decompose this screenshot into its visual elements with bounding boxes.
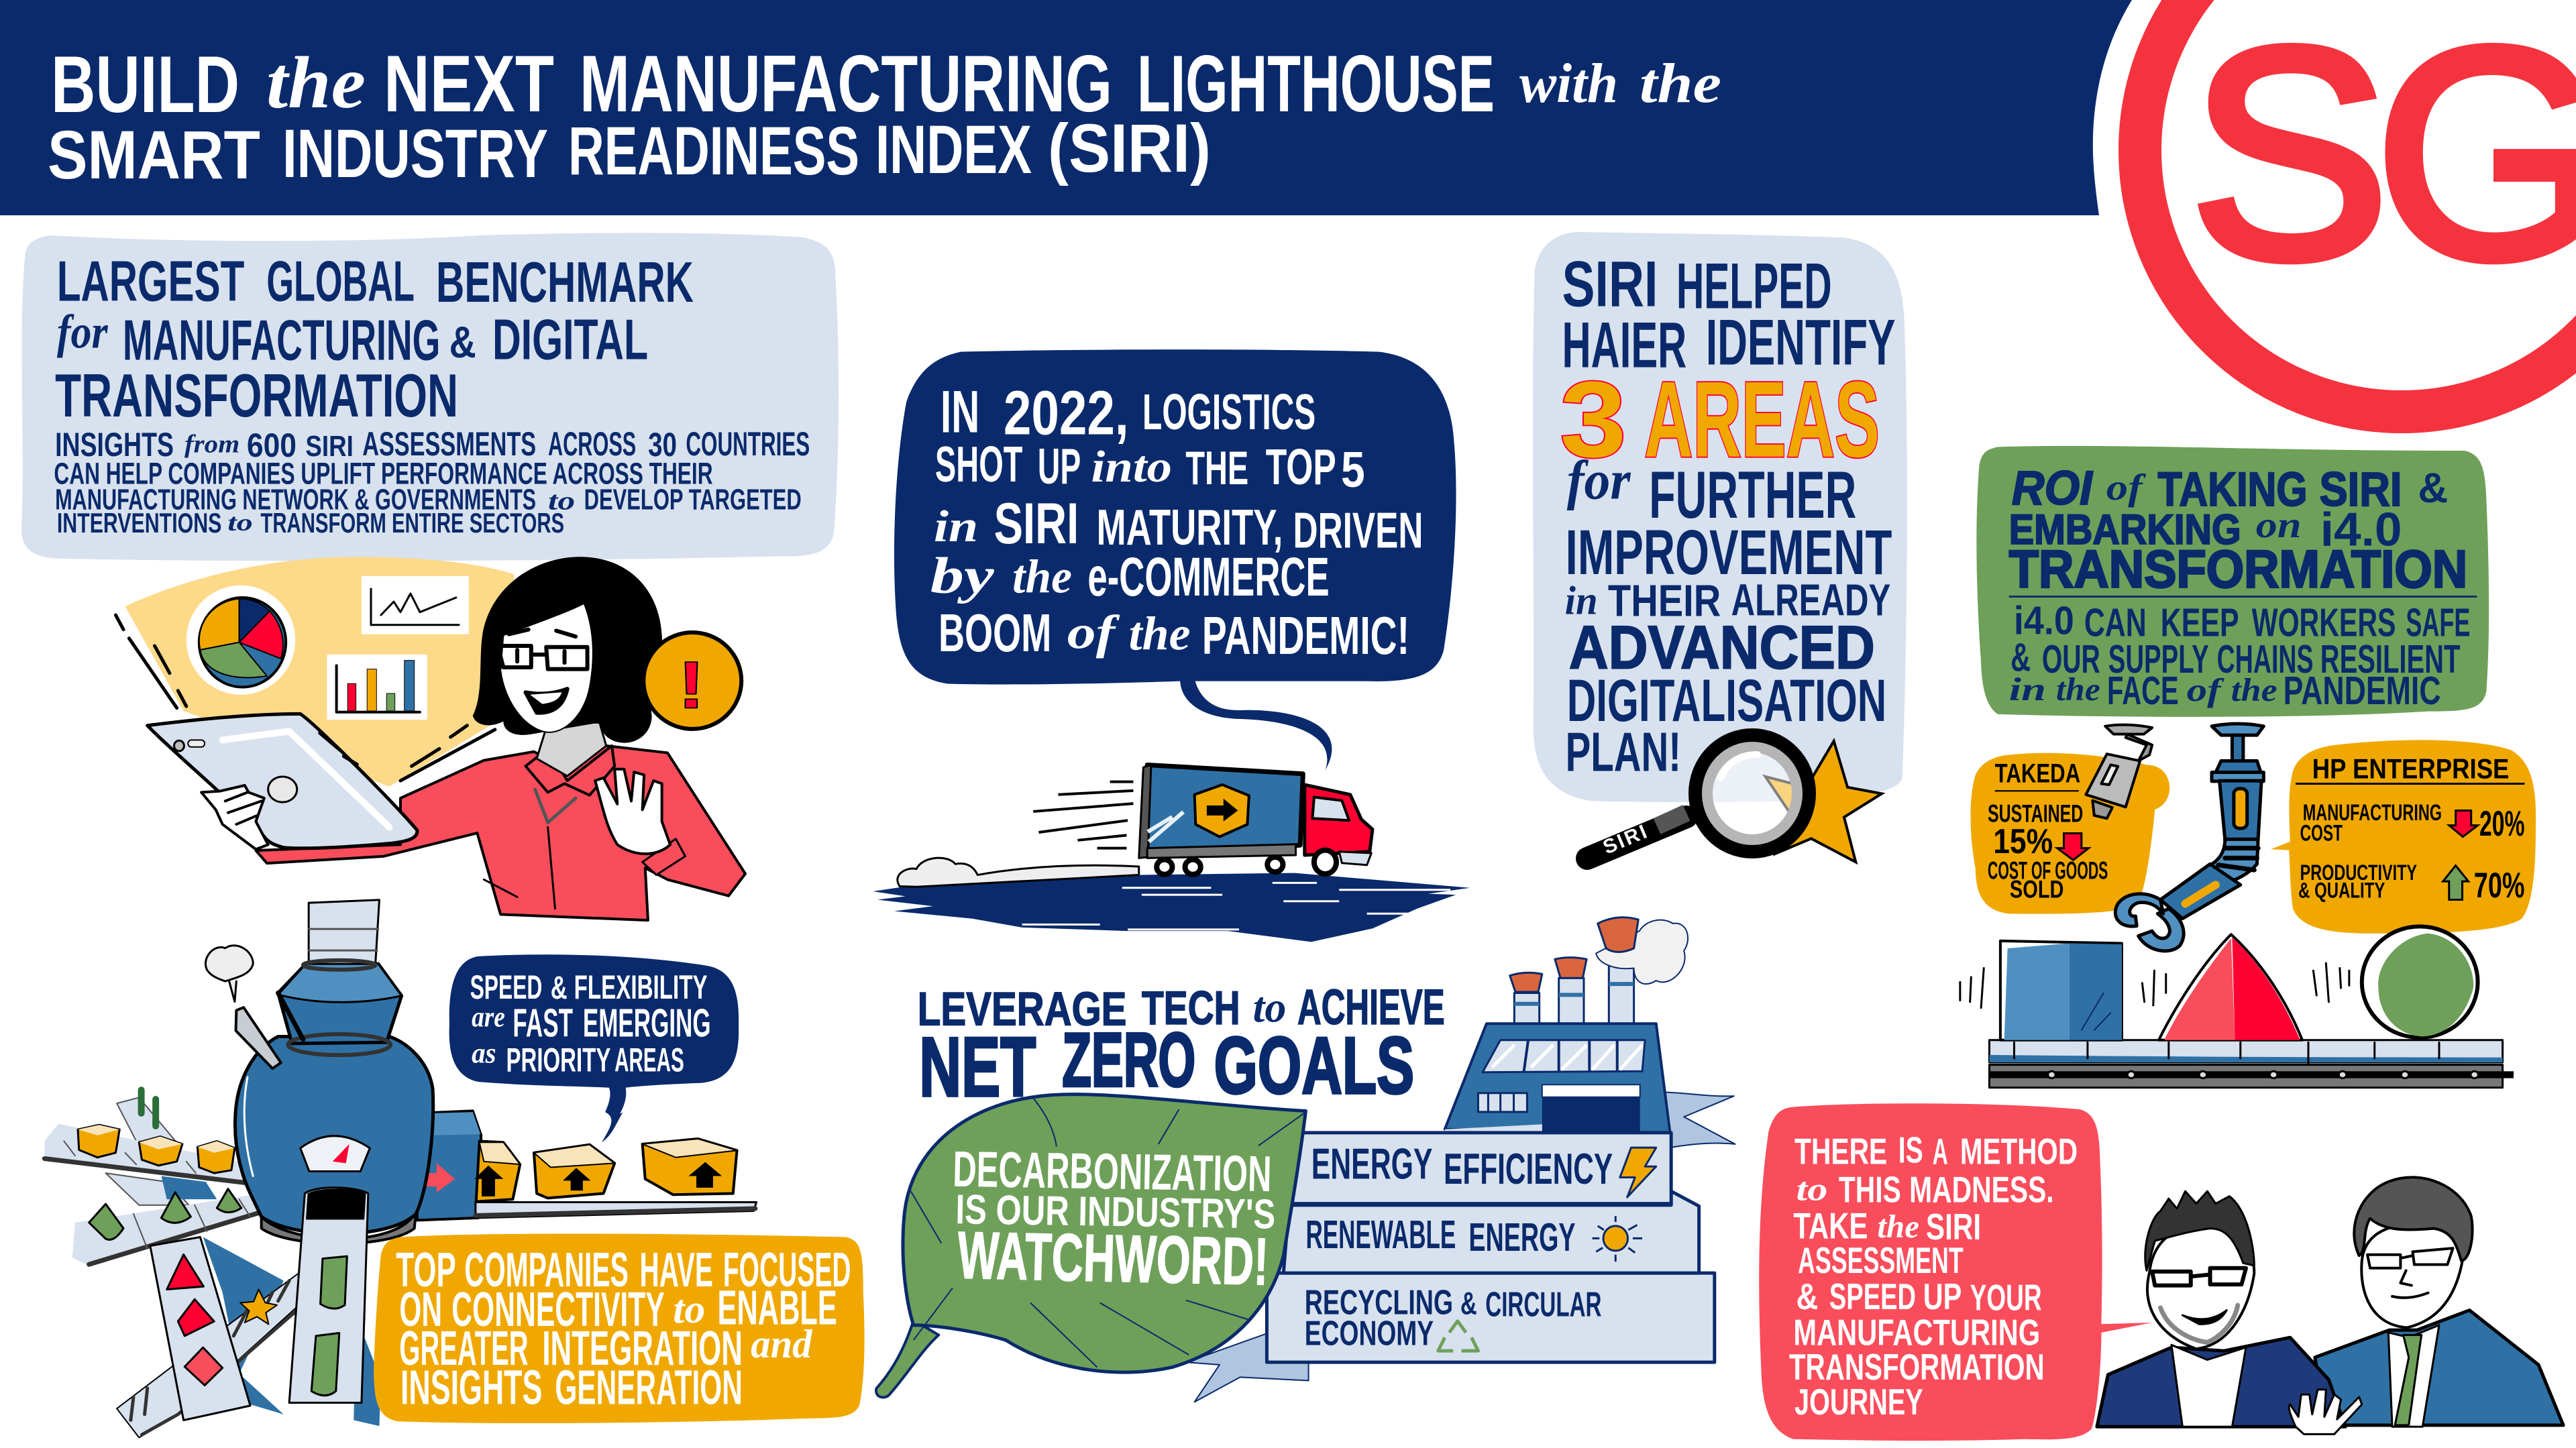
glasses xyxy=(498,646,588,669)
arrow: down red xyxy=(2449,810,2478,837)
text: AREAS xyxy=(1644,359,1880,480)
shirt and arm xyxy=(256,746,745,920)
panel: SIRI helped Haier: for xyxy=(1567,449,1631,510)
projection beam xyxy=(125,557,515,787)
leaf: WATCHWORD! xyxy=(957,1218,1269,1299)
panel: ROI of taking SIRI: TRANSFORMATION xyxy=(2009,541,2467,599)
icon: star xyxy=(1766,741,1882,862)
callout: top companies: COMPANIES xyxy=(464,1243,629,1298)
speech bubble: logistics: PANDEMIC! xyxy=(1202,606,1409,665)
leaf: DECARBONIZATION xyxy=(953,1140,1272,1202)
panel: ROI of taking SIRI: CAN xyxy=(2084,600,2147,645)
callout: Takeda: TAKEDA xyxy=(1995,758,2080,788)
step: recycling: & xyxy=(1460,1286,1477,1321)
callout: Takeda: SUSTAINED xyxy=(1988,800,2083,828)
callout: there is a method: SPEED xyxy=(1829,1277,1916,1317)
speech bubble: logistics: BOOM xyxy=(938,603,1051,663)
speech bubble: logistics: into xyxy=(1091,442,1172,492)
speech bubble: speed and flexibility: are xyxy=(472,1001,505,1034)
machine: pipe xyxy=(236,1007,281,1068)
callout: HP Enterprise: COST xyxy=(2300,820,2343,846)
callout: there is a method: & xyxy=(1796,1277,1818,1317)
panel: ROI of taking SIRI: PANDEMIC xyxy=(2284,668,2441,713)
callout: there is a method: JOURNEY xyxy=(1794,1382,1923,1423)
panel: SIRI helped Haier xyxy=(1533,232,1907,862)
panel: ROI of taking SIRI: OUR xyxy=(2042,636,2100,681)
heading: net zero goals xyxy=(918,979,1445,1115)
chute with cylinders xyxy=(289,1188,368,1403)
callout: there is a method: IS xyxy=(1898,1130,1923,1171)
body text: insights: 600 xyxy=(247,427,297,464)
icon: lightning bolt xyxy=(1620,1148,1656,1197)
title banner: INDUSTRY xyxy=(282,115,548,192)
truck box xyxy=(1147,765,1303,855)
step: recycling xyxy=(1267,1273,1715,1362)
panel: ROI of taking SIRI: in xyxy=(2009,671,2046,708)
panel: ROI of taking SIRI: WORKERS xyxy=(2252,600,2396,645)
callout: top companies: CONNECTIVITY xyxy=(451,1283,665,1337)
speech bubble: speed and flexibility xyxy=(449,954,739,1142)
heading: net zero goals: TECH xyxy=(1142,981,1240,1034)
callout: there is a method: TAKE xyxy=(1793,1206,1868,1247)
star xyxy=(240,1290,277,1325)
text: COUNTRIES xyxy=(686,425,810,463)
left man xyxy=(2097,1191,2345,1427)
pie chart xyxy=(186,586,295,695)
callout: HP Enterprise: MANUFACTURING xyxy=(2303,799,2442,826)
callout: top companies: ON xyxy=(399,1283,442,1337)
arrow: down red xyxy=(2057,833,2089,860)
heading: largest global benchmark: MANUFACTURING xyxy=(123,309,440,372)
panel: ROI of taking SIRI: ROI xyxy=(2012,462,2093,515)
heading: net zero goals: ACHIEVE xyxy=(1297,979,1445,1035)
road xyxy=(873,873,1470,942)
leaf: IS OUR INDUSTRY'S xyxy=(955,1186,1276,1237)
heading: net zero goals: to xyxy=(1253,983,1286,1031)
title banner: READINESS xyxy=(568,113,859,189)
text: IDENTIFY xyxy=(1706,307,1895,379)
panel: ROI of taking SIRI: EMBARKING xyxy=(2009,506,2241,553)
callout: there is a method: to xyxy=(1796,1172,1827,1208)
blue cube xyxy=(2000,941,2122,1040)
speech bubble: logistics: e-COMMERCE xyxy=(1087,547,1330,608)
right man xyxy=(2315,1177,2563,1427)
raised hand xyxy=(595,769,670,854)
raised hand xyxy=(2289,1390,2362,1434)
ribbon left xyxy=(1186,1333,1309,1402)
panel: SIRI helped Haier: PLAN! xyxy=(1566,721,1681,783)
machine: duct with arrow xyxy=(417,1111,481,1220)
step: renewable: ENERGY xyxy=(1468,1215,1576,1260)
body text: insights: MANUFACTURING NETWORK & GOVERNMENTS xyxy=(55,483,536,516)
panel: SIRI helped Haier: in xyxy=(1565,578,1598,623)
speech bubble: logistics: in xyxy=(934,502,978,551)
panel: SIRI helped Haier: FURTHER xyxy=(1649,458,1856,532)
step: recycling: CIRCULAR xyxy=(1485,1284,1602,1324)
body text: insights: INTERVENTIONS xyxy=(57,507,221,539)
ribbon right xyxy=(1659,1092,1735,1148)
speech bubble: speed and flexibility: FLEXIBILITY xyxy=(574,968,708,1006)
text: IMPROVEMENT xyxy=(1566,517,1892,588)
speech bubble: logistics: MATURITY, xyxy=(1097,500,1283,556)
panel: ROI of taking SIRI: SIRI xyxy=(2320,463,2402,516)
camera xyxy=(2086,725,2152,818)
red pyramid xyxy=(2159,934,2302,1040)
callout: there is a method: YOUR xyxy=(1970,1278,2042,1319)
speech bubble: logistics: IN xyxy=(941,378,979,445)
heading: net zero goals: ZERO xyxy=(1062,1017,1195,1103)
factory xyxy=(1445,917,1688,1133)
bar chart card xyxy=(327,655,427,720)
panel: SIRI helped Haier: ALREADY xyxy=(1731,575,1890,625)
panel: ROI of taking SIRI: SAFE xyxy=(2406,600,2470,645)
speech bubble: logistics: the xyxy=(1012,550,1072,603)
icon: magnifying glass xyxy=(1587,735,1809,858)
heading: largest global benchmark: LARGEST xyxy=(57,249,244,313)
panel: ROI of taking SIRI: FACE xyxy=(2107,668,2179,713)
callout: top companies: ENABLE xyxy=(718,1281,837,1335)
panel: ROI of taking SIRI: of xyxy=(2106,468,2147,508)
illustration: smart factory machine and conveyors xyxy=(44,900,757,1438)
face xyxy=(500,604,593,732)
step: energy efficiency: EFFICIENCY xyxy=(1444,1144,1613,1193)
speed lines xyxy=(1033,782,1133,848)
conveyor: cones xyxy=(72,1189,262,1266)
body text: insights: ACROSS xyxy=(548,425,636,463)
speech bubble: logistics: the xyxy=(1129,607,1190,660)
title banner xyxy=(0,0,2132,215)
callout: there is a method: METHOD xyxy=(1960,1131,2078,1172)
arrow: up green xyxy=(2443,866,2469,900)
line chart card xyxy=(362,576,469,634)
speech bubble: logistics: SHOT xyxy=(935,436,1022,492)
vibration lines xyxy=(1960,963,2349,1008)
speech bubble: logistics: SIRI xyxy=(994,492,1079,556)
title banner: the xyxy=(266,42,366,123)
speech bubble: speed and flexibility: AREAS xyxy=(614,1041,684,1079)
callout: HP Enterprise: & QUALITY xyxy=(2298,879,2385,903)
panel: SIRI helped Haier: ADVANCED xyxy=(1569,614,1875,681)
panel: ROI of taking SIRI: i4.0 xyxy=(2014,598,2074,643)
panel: ROI of taking SIRI: & xyxy=(2010,635,2031,679)
title banner: with xyxy=(1519,52,1618,115)
text: DIGITALISATION xyxy=(1567,667,1886,734)
callout: there is a method: THERE xyxy=(1794,1131,1887,1172)
panel: ROI of taking SIRI: TAKING xyxy=(2158,463,2308,516)
callout: Takeda: 15% xyxy=(1993,822,2053,860)
collar and necklace xyxy=(525,746,614,795)
exclamation bubble: ! xyxy=(678,648,705,722)
wheels xyxy=(1157,850,1336,875)
heading: largest global benchmark: & xyxy=(449,318,476,367)
panel: ROI of taking SIRI: RESILIENT xyxy=(2320,636,2460,681)
panel: SIRI helped Haier: SIRI xyxy=(1562,247,1658,320)
heading: largest global benchmark xyxy=(55,249,694,429)
conveyor: bottom left xyxy=(117,1272,301,1438)
truck cab xyxy=(1305,785,1373,865)
illustration: robot arm, camera and production line xyxy=(1960,724,2514,1088)
panel: ROI of taking SIRI: of xyxy=(2187,671,2224,708)
title banner: LIGHTHOUSE xyxy=(1137,39,1495,129)
body text: insights: TRANSFORM ENTIRE SECTORS xyxy=(260,507,564,539)
speech bubble: logistics: UP xyxy=(1038,438,1081,494)
heading: largest global benchmark: GLOBAL xyxy=(266,249,415,313)
callout: Takeda: SOLD xyxy=(2010,876,2064,903)
body text: insights xyxy=(54,425,810,539)
callout: there is a method: THIS xyxy=(1839,1170,1901,1211)
cuff xyxy=(643,839,685,875)
speech bubble: speed and flexibility: & xyxy=(551,970,568,1006)
step: recycling: RECYCLING xyxy=(1305,1282,1453,1322)
panel: ROI of taking SIRI: KEEP xyxy=(2161,600,2239,645)
step: energy efficiency xyxy=(1292,1133,1671,1204)
panel: ROI of taking SIRI: the xyxy=(2231,671,2277,708)
panel: SIRI helped Haier: HAIER xyxy=(1562,309,1686,381)
panel: ROI of taking SIRI: on xyxy=(2256,506,2302,546)
callout: top companies xyxy=(374,1233,865,1423)
speech bubble: logistics: 5 xyxy=(1341,442,1365,498)
title banner: NEXT xyxy=(384,39,554,129)
body text: insights: SIRI xyxy=(305,429,354,463)
speech bubble: logistics xyxy=(894,349,1456,770)
callout: HP Enterprise: 20% xyxy=(2479,803,2524,843)
heading: net zero goals: NET xyxy=(919,1020,1036,1115)
speech bubble: logistics: DRIVEN xyxy=(1293,502,1423,559)
step: renewable: RENEWABLE xyxy=(1305,1213,1456,1257)
body text: insights: INSIGHTS xyxy=(55,426,174,463)
callout: there is a method: A xyxy=(1933,1131,1948,1172)
speech bubble: logistics: by xyxy=(930,547,994,604)
callout: there is a method: the xyxy=(1877,1209,1919,1245)
callout: Takeda xyxy=(1970,753,2169,914)
callout: top companies: HAVE xyxy=(639,1243,713,1298)
blue lower structure xyxy=(161,1176,381,1426)
conveyor: output boxes xyxy=(474,1139,757,1218)
body text: insights: to xyxy=(548,486,575,516)
title banner: (SIRI) xyxy=(1048,110,1211,186)
callout: there is a method xyxy=(1759,1103,2152,1441)
conveyor: boxes input xyxy=(44,1123,250,1183)
illustration: two men in suits xyxy=(2097,1177,2563,1434)
tablet xyxy=(148,714,417,848)
callout: HP Enterprise: PRODUCTIVITY xyxy=(2300,861,2417,885)
icon: recycling triangle xyxy=(1438,1321,1478,1351)
speech bubble: logistics: THE xyxy=(1185,442,1248,494)
panel: SIRI helped Haier: HELPED xyxy=(1676,249,1832,322)
callout: top companies: TOP xyxy=(396,1243,456,1298)
title banner: INDEX xyxy=(875,111,1032,188)
title banner: SMART xyxy=(48,117,260,193)
body text: insights: 30 xyxy=(648,426,677,463)
callout: there is a method: ASSESSMENT xyxy=(1798,1241,1964,1281)
callout: HP Enterprise: HP ENTERPRISE xyxy=(2312,754,2509,785)
panel: ROI of taking SIRI: CHAINS xyxy=(2217,636,2314,681)
callout: there is a method: SIRI xyxy=(1926,1207,1981,1247)
panel: ROI of taking SIRI xyxy=(1976,446,2489,717)
robot arm xyxy=(2115,724,2263,951)
panel: largest global benchmark: BENCHMARK xyxy=(436,251,694,314)
speech bubble: speed and flexibility: SPEED xyxy=(470,968,542,1006)
motion lines xyxy=(115,615,495,781)
machine: tank xyxy=(235,900,433,1243)
callout: Takeda: COST OF GOODS xyxy=(1988,857,2108,885)
heading: net zero goals: GOALS xyxy=(1214,1021,1414,1110)
panel: largest global benchmark: DEVELOP TARGETED xyxy=(584,483,802,516)
steam cloud xyxy=(205,946,253,1001)
callout: top companies: to xyxy=(673,1286,705,1331)
body text: insights: to xyxy=(227,508,253,536)
exclamation bubble xyxy=(626,632,741,729)
callout: there is a method: TRANSFORMATION xyxy=(1789,1347,2045,1388)
step: renewable xyxy=(1283,1191,1699,1273)
title banner: MANUFACTURING xyxy=(580,39,1112,129)
callout: top companies: GENERATION xyxy=(555,1361,743,1415)
speech bubble: speed and flexibility: PRIORITY xyxy=(506,1041,610,1079)
callout: top companies: FOCUSED xyxy=(723,1243,851,1298)
heading: largest global benchmark: TRANSFORMATION xyxy=(55,361,458,429)
speech bubble: speed and flexibility: FAST xyxy=(513,1001,573,1046)
hair xyxy=(473,557,662,743)
highlight: 3 areas: 3 xyxy=(1560,359,1626,480)
callout: there is a method: UP xyxy=(1923,1277,1962,1317)
callout: top companies: INSIGHTS xyxy=(400,1361,542,1415)
title banner: the xyxy=(1640,52,1721,115)
speech bubble: logistics: 2022, xyxy=(1004,378,1129,448)
neck xyxy=(537,722,606,776)
heading: largest global benchmark: DIGITAL xyxy=(492,308,648,372)
body text: insights: ASSESSMENTS xyxy=(362,425,536,463)
highlight: 3 areas xyxy=(1560,359,1880,480)
panel: SIRI helped Haier: THEIR xyxy=(1608,575,1721,626)
icon: sun xyxy=(1592,1216,1642,1262)
panel: ROI of taking SIRI: & xyxy=(2418,465,2448,512)
panel: largest global benchmark xyxy=(21,233,839,561)
speech bubble: logistics: TOP xyxy=(1266,439,1336,496)
callout: there is a method: MANUFACTURING xyxy=(1793,1313,2040,1353)
green sphere xyxy=(2362,926,2478,1038)
callout: top companies: INTEGRATION xyxy=(542,1322,743,1376)
production conveyor xyxy=(1989,1040,2514,1088)
panel: ROI of taking SIRI: i4.0 xyxy=(2320,503,2402,556)
heading: net zero goals: LEVERAGE xyxy=(918,983,1126,1036)
illustration: delivery truck on road xyxy=(873,765,1470,942)
step: recycling: ECONOMY xyxy=(1305,1313,1434,1353)
logo: SG ring xyxy=(2140,0,2576,412)
truck logo xyxy=(1195,785,1249,837)
callout: top companies: and xyxy=(751,1321,813,1366)
panel: largest global benchmark: CAN HELP COMPANIES UPLIFT PERFORMANCE ACROSS THEIR xyxy=(54,457,713,490)
eyes and mouth xyxy=(509,630,576,713)
panel: ROI of taking SIRI: SUPPLY xyxy=(2108,636,2209,681)
step: energy efficiency: ENERGY xyxy=(1311,1139,1432,1188)
panel: ROI of taking SIRI: the xyxy=(2056,671,2100,708)
title banner: BUILD xyxy=(51,40,239,129)
speech bubble: logistics: LOGISTICS xyxy=(1142,384,1316,440)
conveyor: rear green bars xyxy=(106,1097,189,1205)
hand holding tablet xyxy=(201,785,268,849)
dust cloud xyxy=(898,858,1139,887)
leaf xyxy=(876,1095,1305,1397)
speech bubble: speed and flexibility: EMERGING xyxy=(583,1001,711,1046)
speech bubble: logistics: of xyxy=(1067,606,1120,659)
callout: top companies: GREATER xyxy=(399,1322,529,1376)
icon: magnifying glass: SIRI xyxy=(1600,820,1652,858)
conveyor: pyramids xyxy=(150,1237,250,1421)
illustration: woman presenting with tablet xyxy=(115,557,745,920)
truck chassis xyxy=(1147,844,1296,858)
illustration: net zero steps, leaf and factory xyxy=(876,917,1735,1402)
body text: insights: from xyxy=(184,430,239,459)
speech bubble: speed and flexibility: as xyxy=(472,1038,496,1070)
heading: largest global benchmark: for xyxy=(57,305,109,358)
callout: there is a method: MADNESS. xyxy=(1909,1170,2054,1211)
callout: HP Enterprise: 70% xyxy=(2474,865,2524,905)
callout: HP Enterprise xyxy=(2271,740,2536,934)
